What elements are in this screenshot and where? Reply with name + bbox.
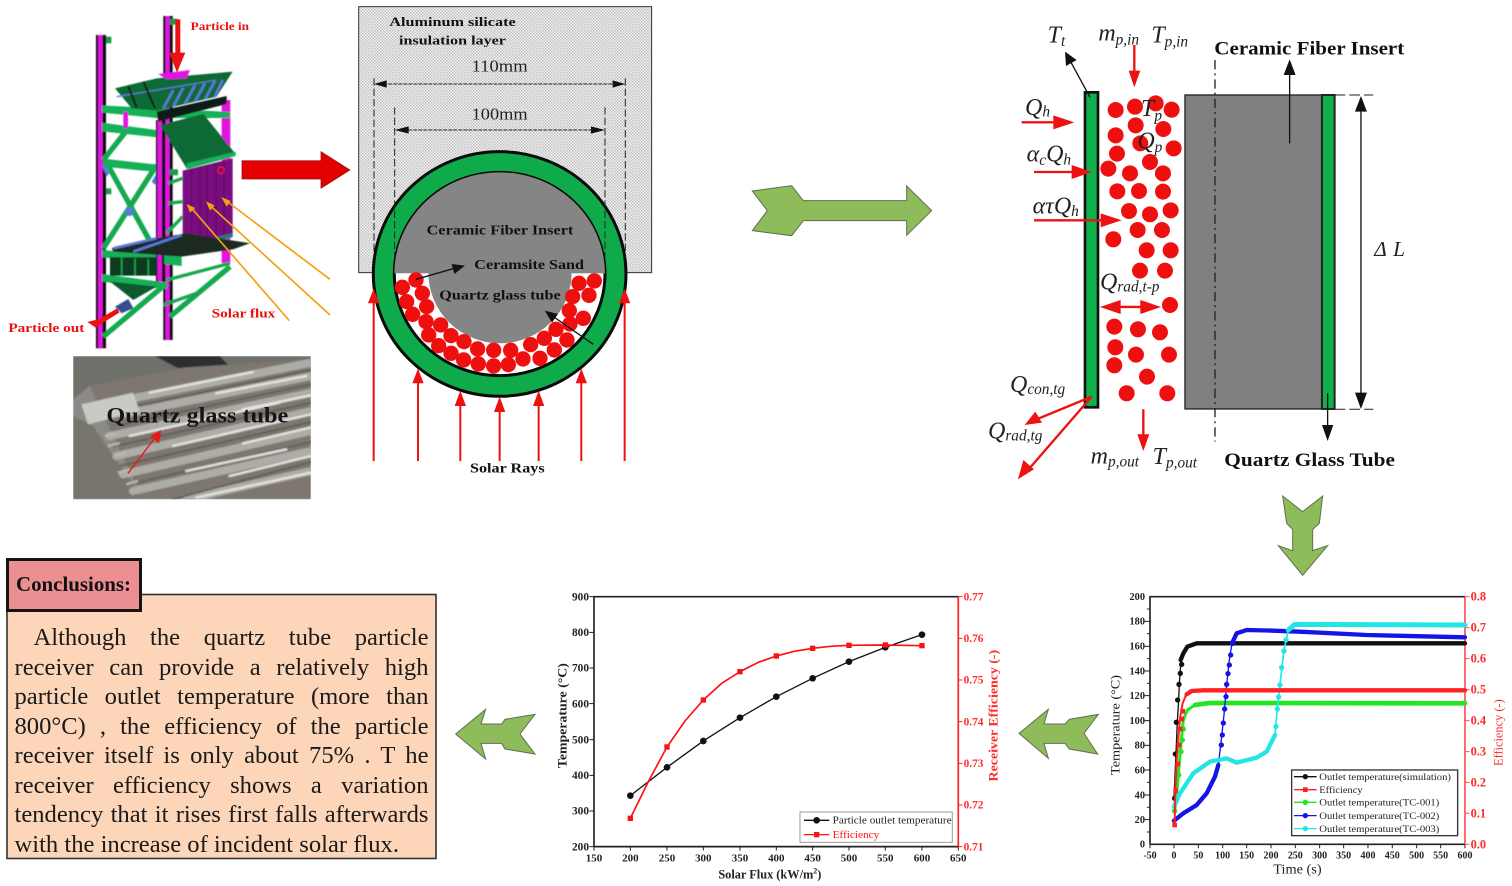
conclusions text: receiver efficiency shows a variation — [14, 772, 428, 798]
falling particles — [1100, 95, 1182, 401]
conclusions text: receiver itself is only about 75% . T he — [14, 742, 428, 769]
braces — [103, 128, 230, 337]
x axis labels: 0 — [1171, 850, 1176, 861]
left axis labels: 80 — [1135, 741, 1145, 752]
legend — [1292, 770, 1458, 836]
ceramsite particles — [395, 272, 602, 374]
right axis labels: 0.75 — [964, 675, 984, 687]
heat transfer symbols: p — [1153, 108, 1162, 125]
left axis title: Temperature (°C) — [556, 663, 570, 768]
left axis labels: 800 — [572, 627, 589, 639]
right axis labels: 0.0 — [1471, 837, 1486, 851]
heat transfer symbols: T — [1151, 23, 1165, 49]
series: TC-001 — [1172, 703, 1465, 814]
legend: Outlet temperature(TC-003) — [1319, 824, 1439, 835]
plot frame — [589, 597, 962, 851]
heat transfer symbols: Q — [1010, 372, 1027, 398]
right axis labels: 0.6 — [1471, 652, 1486, 666]
x axis labels: 300 — [695, 853, 712, 865]
right axis labels: 0.8 — [1471, 590, 1486, 604]
x axis labels: 500 — [841, 853, 858, 865]
conclusions text: with the increase of incident solar flux. — [14, 830, 399, 858]
left axis labels: 20 — [1135, 815, 1145, 826]
solar flux label: Solar flux — [212, 306, 276, 320]
left axis labels: 100 — [1129, 716, 1145, 727]
heat transfer symbols: h — [1042, 103, 1050, 120]
series: efficiency — [628, 642, 925, 821]
left axis labels: 180 — [1129, 617, 1145, 628]
x axis labels: 200 — [622, 853, 639, 865]
heat transfer symbols: rad,t-p — [1117, 278, 1160, 295]
x axis labels: 150 — [1239, 850, 1254, 861]
x axis labels: 100 — [1215, 850, 1230, 861]
left axis labels: 300 — [572, 806, 589, 818]
left tube wall — [1085, 92, 1098, 407]
block labels: Quartz Glass Tube — [1224, 450, 1395, 471]
photo arrow — [128, 430, 161, 473]
heat transfer symbols: Q — [1025, 95, 1042, 121]
purple tube panel — [183, 158, 233, 248]
legend: Particle outlet temperature — [833, 816, 952, 827]
x axis labels: 150 — [586, 853, 603, 865]
x axis labels: 350 — [1336, 850, 1351, 861]
x axis labels — [586, 853, 967, 865]
heat transfer symbols: α — [1027, 142, 1039, 168]
left axis labels: 200 — [572, 841, 589, 853]
photo caption: Quartz glass tube — [106, 403, 289, 428]
particle out label: Particle out — [8, 321, 85, 335]
heat transfer symbols: rad,tg — [1005, 427, 1043, 444]
heat transfer symbols: Q — [1137, 129, 1155, 155]
heat transfer symbols: p,in — [1164, 34, 1188, 51]
x axis labels: 450 — [804, 853, 821, 865]
solar ray arrows — [368, 289, 630, 461]
legend: Efficiency — [1319, 785, 1363, 796]
cross-section labels — [427, 223, 584, 303]
delta L label: Δ L — [1373, 237, 1405, 261]
heat transfer symbols: m — [1091, 443, 1108, 469]
right axis labels: 0.76 — [964, 633, 984, 645]
series: particle outlet temperature — [627, 631, 925, 799]
extent dashes — [1335, 95, 1373, 409]
right axis labels: 0.1 — [1471, 806, 1486, 820]
x axis labels: 400 — [768, 853, 785, 865]
particle in arrow — [169, 19, 185, 73]
x axis labels: 350 — [732, 853, 749, 865]
green arrow: flux chart to conclusions — [456, 709, 535, 759]
conclusions body panel — [7, 594, 436, 858]
legend — [800, 812, 952, 842]
conclusions heading tag: Conclusions: — [16, 572, 131, 596]
green arrow: transient chart to flux chart — [1019, 709, 1098, 758]
green arrow: model to transient chart — [1278, 496, 1328, 575]
x axis labels: 450 — [1385, 850, 1400, 861]
left axis labels: 140 — [1129, 666, 1145, 677]
heat transfer symbols: T — [1153, 444, 1166, 470]
ceramic insert block — [1185, 95, 1322, 409]
right axis labels: 0.4 — [1471, 714, 1486, 728]
x axis labels: 650 — [950, 853, 967, 865]
particle in label: Particle in — [191, 19, 249, 33]
x axis labels: 200 — [1263, 850, 1278, 861]
conclusions heading tag — [8, 560, 140, 610]
left column — [96, 35, 106, 348]
left axis labels — [572, 591, 589, 853]
right axis labels: 0.7 — [1471, 621, 1486, 635]
right axis labels: 0.77 — [964, 591, 984, 603]
ceramic fiber insert — [394, 172, 605, 344]
heat transfer symbols: ατQ — [1033, 193, 1071, 219]
cross-section labels: Ceramic Fiber Insert — [427, 223, 574, 238]
conclusions text: receiver can provide a relatively high — [14, 654, 428, 680]
heat transfer symbols: t — [1061, 33, 1066, 50]
heat transfer symbols: p,out — [1107, 454, 1140, 471]
chart: temperature and efficiency vs solar flux — [556, 591, 1000, 881]
heat transfer symbols: p,in — [1115, 32, 1139, 49]
x axis title: 2 — [813, 867, 817, 876]
left axis labels: 700 — [572, 663, 589, 675]
legend: Efficiency — [833, 830, 880, 841]
left axis title: Temperature (°C) — [1108, 675, 1122, 775]
heat transfer symbols: c — [1039, 152, 1046, 169]
x axis labels: 50 — [1193, 850, 1203, 861]
x axis labels: 550 — [877, 853, 894, 865]
leader arrows — [416, 264, 593, 344]
heat transfer symbols: con,tg — [1027, 381, 1066, 398]
x axis labels: 250 — [659, 853, 676, 865]
left axis labels: 60 — [1135, 765, 1145, 776]
glass tube ring — [373, 152, 626, 396]
heat transfer model diagram — [988, 21, 1405, 479]
conclusions text: tendency that it rises first falls afterwards — [14, 801, 428, 828]
cross-section labels: Ceramsite Sand — [474, 258, 584, 273]
left axis labels: 200 — [1129, 592, 1145, 603]
x axis labels: 250 — [1288, 850, 1303, 861]
right axis labels: 0.73 — [964, 758, 984, 770]
back columns — [163, 16, 173, 340]
orange solar flux arrows — [187, 197, 330, 321]
legend: Outlet temperature(TC-002) — [1319, 811, 1439, 822]
x axis labels: 400 — [1360, 850, 1375, 861]
axis dash line — [1213, 60, 1217, 442]
heat transfer symbols: m — [1098, 21, 1116, 47]
left axis labels: 600 — [572, 698, 589, 710]
right axis labels — [1471, 590, 1486, 851]
lower platform — [112, 233, 250, 257]
particle out arrow — [87, 308, 119, 328]
tower illustration: particle receiver structure — [8, 16, 350, 348]
heat transfer symbols: Q — [1100, 269, 1117, 295]
dashed extension lines — [374, 78, 625, 258]
right axis labels: 0.2 — [1471, 775, 1486, 789]
heat transfer symbols — [988, 21, 1198, 471]
block labels — [1214, 38, 1405, 471]
black arrows — [1065, 52, 1367, 441]
series: TC-002 — [1174, 630, 1465, 821]
right axis labels: 0.5 — [1471, 683, 1486, 697]
left axis labels — [1129, 592, 1145, 851]
right axis title: Receiver Efficiency (-) — [986, 650, 1000, 781]
heat transfer symbols: Q — [988, 418, 1005, 444]
heat transfer symbols: p — [1154, 139, 1163, 156]
right tube wall — [1322, 95, 1335, 409]
green arrow: cross-section to heat model — [752, 186, 932, 236]
x axis labels: 300 — [1312, 850, 1327, 861]
big red arrow — [242, 152, 350, 188]
target ring — [218, 167, 224, 174]
dimension 100mm: 100mm — [472, 104, 528, 123]
red heat flow arrows — [1018, 45, 1161, 479]
x axis title: Time (s) — [1273, 861, 1322, 876]
solar rays label: Solar Rays — [470, 462, 545, 477]
x axis title: ) — [817, 867, 821, 881]
x axis labels: 500 — [1409, 850, 1424, 861]
x axis labels — [1143, 850, 1472, 861]
left axis labels: 160 — [1129, 642, 1145, 653]
right axis labels — [964, 591, 984, 853]
dimension 110mm: 110mm — [472, 56, 528, 75]
x axis labels: -50 — [1143, 850, 1157, 861]
heat transfer symbols: T — [1048, 23, 1061, 49]
plot frame — [1145, 597, 1470, 848]
left axis labels: 500 — [572, 734, 589, 746]
conclusions text: particle outlet temperature (more than — [14, 683, 428, 710]
cross-section labels: Quartz glass tube — [439, 288, 561, 303]
x axis labels: 600 — [1457, 850, 1472, 861]
series: simulation — [1172, 643, 1465, 801]
x axis title: Solar Flux (kW/m — [718, 867, 813, 881]
heat transfer symbols: p,out — [1165, 454, 1198, 471]
left axis labels: 900 — [572, 591, 589, 603]
conclusions text: 800°C) , the efficiency of the particle — [14, 712, 428, 740]
right axis labels: 0.74 — [964, 716, 984, 728]
right axis labels: 0.72 — [964, 800, 984, 812]
insulation label: insulation layer — [399, 34, 506, 48]
x axis labels: 600 — [914, 853, 931, 865]
heat transfer symbols: h — [1071, 203, 1079, 220]
dimension 110mm — [374, 56, 625, 88]
x axis labels: 550 — [1433, 850, 1448, 861]
heat transfer symbols: h — [1063, 151, 1071, 168]
block labels: Ceramic Fiber Insert — [1214, 38, 1405, 59]
right axis title: Efficiency (-) — [1491, 699, 1505, 766]
heat transfer symbols: Q — [1046, 142, 1063, 168]
insulation layer — [359, 7, 652, 273]
left axis labels: 40 — [1135, 790, 1145, 801]
insulation label: Aluminum silicate — [389, 15, 516, 29]
photo: quartz glass tubes — [73, 356, 311, 499]
insulation label — [389, 15, 516, 48]
dimension 100mm — [395, 104, 605, 134]
conclusions text — [14, 624, 428, 858]
left axis labels: 400 — [572, 770, 589, 782]
series: TC-003 — [1174, 624, 1465, 807]
sloped cover — [160, 114, 236, 168]
series: efficiency — [1172, 690, 1465, 827]
left axis labels: 0 — [1140, 840, 1145, 851]
legend: Outlet temperature(simulation) — [1319, 772, 1451, 783]
tube cross-section diagram — [359, 7, 652, 477]
heat transfer symbols: T — [1141, 96, 1154, 122]
right axis labels: 0.3 — [1471, 745, 1486, 759]
right axis labels: 0.71 — [964, 841, 984, 853]
front mid column — [156, 120, 164, 282]
conclusions text: Although the quartz tube particle — [34, 624, 428, 651]
legend: Outlet temperature(TC-001) — [1319, 798, 1439, 809]
hopper top — [115, 72, 233, 111]
chart: transient outlet temperature and efficiency — [1108, 590, 1505, 876]
left axis labels: 120 — [1129, 691, 1145, 702]
